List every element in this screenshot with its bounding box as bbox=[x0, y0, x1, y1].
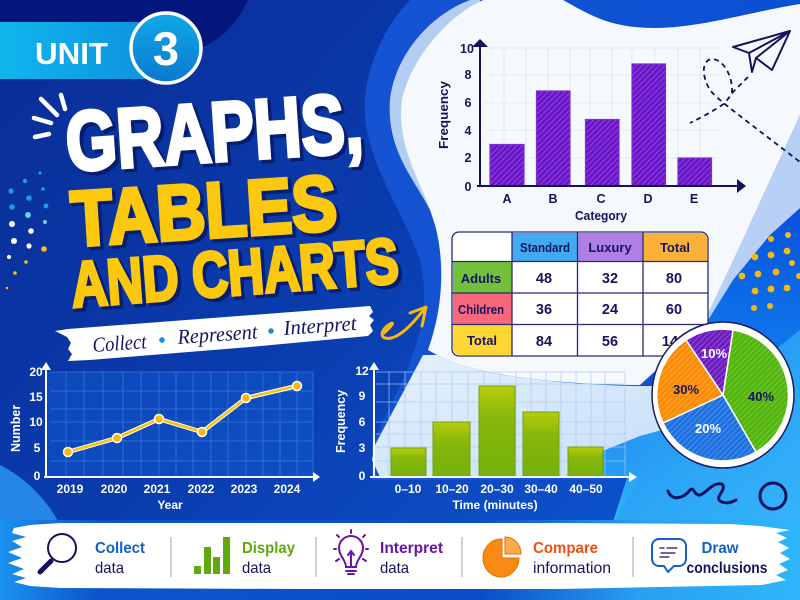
icon: magnifying glass bbox=[40, 534, 76, 572]
item: display data: Display bbox=[242, 540, 295, 557]
pie chart bbox=[652, 322, 794, 468]
bottom brush banner bbox=[8, 523, 790, 589]
header cell: total bbox=[643, 233, 707, 262]
y tick labels: 8 bbox=[465, 68, 472, 82]
tick labels: 20 bbox=[29, 365, 43, 379]
line chart: number by year: Number bbox=[9, 405, 23, 452]
tick labels: 9 bbox=[359, 389, 366, 403]
x tick labels: E bbox=[690, 192, 698, 206]
histogram: time in minutes bbox=[334, 362, 637, 512]
title line: and charts: AND CHARTS bbox=[72, 227, 404, 324]
data table: 84 bbox=[536, 334, 552, 350]
icon: paper plane with dashed trail bbox=[690, 31, 800, 162]
item: collect data bbox=[40, 534, 146, 577]
data table: 48 bbox=[536, 271, 552, 287]
title bbox=[63, 75, 404, 324]
table text: Total bbox=[660, 240, 690, 255]
row header: children bbox=[453, 293, 512, 324]
y tick labels: 10 bbox=[460, 42, 474, 56]
tick labels: 5 bbox=[34, 441, 41, 455]
item: draw conclusions bbox=[652, 539, 768, 577]
item: compare information: Compare bbox=[533, 540, 598, 557]
circle doodle bbox=[760, 483, 786, 509]
axes bbox=[477, 45, 740, 186]
white fill bbox=[401, 0, 800, 385]
tick labels: 0 bbox=[359, 469, 366, 483]
unit number badge: 3 bbox=[153, 22, 179, 75]
item: display data: data bbox=[242, 560, 271, 577]
axes bbox=[44, 366, 314, 477]
bars bbox=[391, 386, 603, 477]
table text: Standard bbox=[520, 240, 570, 255]
table text: Children bbox=[458, 302, 504, 317]
tick labels: 20–30 bbox=[480, 482, 514, 496]
tick labels: 3 bbox=[359, 441, 366, 455]
slice: 20 percent bbox=[663, 395, 756, 461]
unit ribbon bbox=[0, 22, 165, 79]
tick labels: 40–50 bbox=[569, 482, 603, 496]
subtitle brush strip: Represent bbox=[176, 319, 259, 349]
pie chart: 10% bbox=[701, 346, 727, 361]
bar chart: category frequency: Frequency bbox=[436, 80, 451, 149]
tick labels: 6 bbox=[359, 415, 366, 429]
y tick labels: 6 bbox=[465, 96, 472, 110]
item: compare information: information bbox=[533, 560, 611, 577]
data table: 24 bbox=[602, 302, 618, 318]
table text: Luxury bbox=[588, 240, 632, 255]
table text bbox=[458, 240, 690, 348]
line chart: number by year bbox=[9, 362, 320, 512]
item: interpret data: Interpret bbox=[380, 540, 444, 557]
item: interpret data bbox=[334, 530, 444, 577]
tick labels: 30–40 bbox=[524, 482, 558, 496]
white blob panel behind the charts bbox=[390, 0, 800, 385]
tick labels: 2023 bbox=[231, 482, 258, 496]
tick labels: 0 bbox=[34, 469, 41, 483]
row header: adults bbox=[453, 262, 512, 292]
title line: and charts: AND CHARTS bbox=[69, 225, 401, 321]
table text: Total bbox=[467, 333, 497, 348]
y tick labels bbox=[460, 42, 474, 194]
title line: graphs: GRAPHS, bbox=[66, 78, 369, 192]
data table: 56 bbox=[602, 334, 618, 350]
tick labels bbox=[355, 364, 603, 512]
item: interpret data: data bbox=[380, 560, 409, 577]
tick labels bbox=[29, 365, 301, 512]
item: compare information bbox=[483, 537, 611, 577]
bars bbox=[490, 64, 712, 186]
data table bbox=[452, 232, 708, 356]
icon: speech bubble bbox=[652, 539, 686, 572]
x tick labels: A bbox=[502, 192, 512, 206]
light outer edge bbox=[390, 0, 480, 240]
tick labels: 2022 bbox=[188, 482, 215, 496]
icon: bar chart bbox=[194, 537, 230, 574]
pie chart: 30% bbox=[673, 382, 699, 397]
slice: 30 percent bbox=[657, 340, 723, 423]
slice: 10 percent bbox=[686, 329, 733, 395]
x tick labels: C bbox=[596, 192, 606, 206]
tick labels: 15 bbox=[29, 390, 43, 404]
item: draw conclusions: conclusions bbox=[686, 560, 768, 577]
tick labels: 10–20 bbox=[435, 482, 469, 496]
light grid area behind histogram bbox=[372, 355, 680, 477]
tick labels: 2019 bbox=[57, 482, 84, 496]
histogram: time in minutes: Frequency bbox=[334, 390, 348, 453]
data table: 60 bbox=[666, 302, 682, 318]
tick labels: 2021 bbox=[144, 482, 171, 496]
tick labels: 2020 bbox=[101, 482, 128, 496]
data points bbox=[64, 382, 302, 456]
dot pattern left bbox=[6, 172, 48, 289]
title line: graphs: GRAPHS, bbox=[63, 75, 365, 189]
icon: light bulb bbox=[334, 530, 368, 574]
y tick labels: 2 bbox=[465, 151, 472, 165]
data table: 36 bbox=[536, 302, 552, 318]
burst marks bbox=[34, 95, 65, 137]
table grid bbox=[452, 232, 708, 356]
y tick labels: 4 bbox=[465, 124, 472, 138]
tick labels: Year bbox=[157, 498, 183, 512]
unit label: UNIT bbox=[35, 36, 108, 71]
data table: 32 bbox=[602, 271, 618, 287]
tick labels: 0–10 bbox=[395, 482, 422, 496]
data table: 80 bbox=[666, 271, 682, 287]
light right band bbox=[695, 115, 800, 335]
data table: 140 bbox=[662, 334, 686, 350]
subtitle brush strip: Collect bbox=[92, 329, 148, 357]
item: display data bbox=[194, 537, 295, 577]
header cell: standard bbox=[512, 233, 577, 262]
title line: tables: TABLES bbox=[68, 158, 339, 263]
icon: pie bbox=[483, 537, 521, 577]
bar chart: category frequency bbox=[436, 39, 746, 223]
x tick labels: D bbox=[643, 192, 653, 206]
axes bbox=[370, 366, 630, 477]
tick labels: 2024 bbox=[274, 482, 301, 496]
y tick labels: 0 bbox=[465, 180, 472, 194]
pie chart: 40% bbox=[748, 389, 774, 404]
pie chart: 20% bbox=[695, 421, 721, 436]
axis titles: Category bbox=[575, 209, 627, 223]
squiggle doodle bbox=[668, 484, 736, 503]
title line: tables: TABLES bbox=[72, 161, 343, 266]
row header: total bbox=[453, 325, 512, 355]
arrow: squiggle yellow bbox=[382, 307, 426, 338]
dots: yellow cluster right bbox=[739, 232, 800, 311]
tick labels: 12 bbox=[355, 364, 369, 378]
slice: 40 percent bbox=[723, 330, 788, 452]
subtitle brush strip: Interpret bbox=[282, 311, 358, 340]
data line bbox=[68, 386, 297, 452]
x tick labels: B bbox=[548, 192, 558, 206]
item: draw conclusions: Draw bbox=[702, 540, 739, 557]
x tick labels bbox=[502, 192, 698, 206]
unit number badge bbox=[131, 13, 201, 83]
header cell: luxury bbox=[578, 233, 642, 262]
table text: Adults bbox=[461, 271, 501, 286]
tick labels: Time (minutes) bbox=[452, 498, 538, 512]
item: collect data: Collect bbox=[95, 540, 146, 557]
subtitle brush strip bbox=[55, 306, 374, 361]
item: collect data: data bbox=[95, 560, 124, 577]
tick labels: 10 bbox=[29, 415, 43, 429]
